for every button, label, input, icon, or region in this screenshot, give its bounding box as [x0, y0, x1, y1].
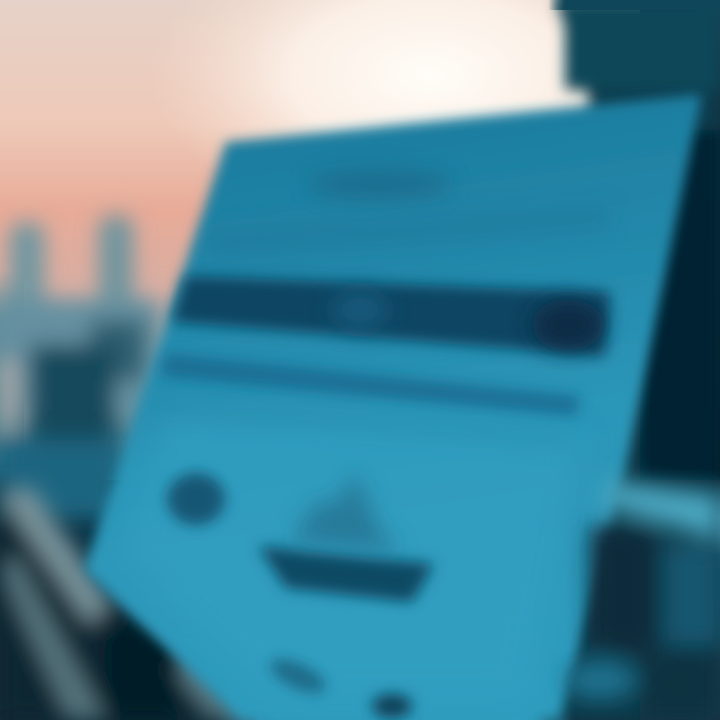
top heading smudge	[308, 170, 452, 198]
dark building at top right and right edge	[540, 0, 720, 720]
board surface	[84, 94, 702, 720]
skyline towers at left	[0, 215, 160, 520]
icon: small dark shape	[167, 473, 225, 525]
foreground object at lower right	[564, 480, 720, 720]
icon: ship superstructure	[290, 472, 400, 552]
dark banner	[172, 276, 610, 356]
bottom smudges	[266, 652, 330, 700]
foreground railing at bottom left	[0, 480, 260, 720]
blue board	[84, 94, 702, 720]
faint line	[148, 400, 570, 446]
line below banner	[160, 354, 580, 416]
icon: ship hull	[258, 546, 434, 602]
building top edge backing	[548, 0, 720, 10]
subheading smudge	[205, 205, 610, 256]
lighter lower panel shading	[120, 410, 580, 700]
